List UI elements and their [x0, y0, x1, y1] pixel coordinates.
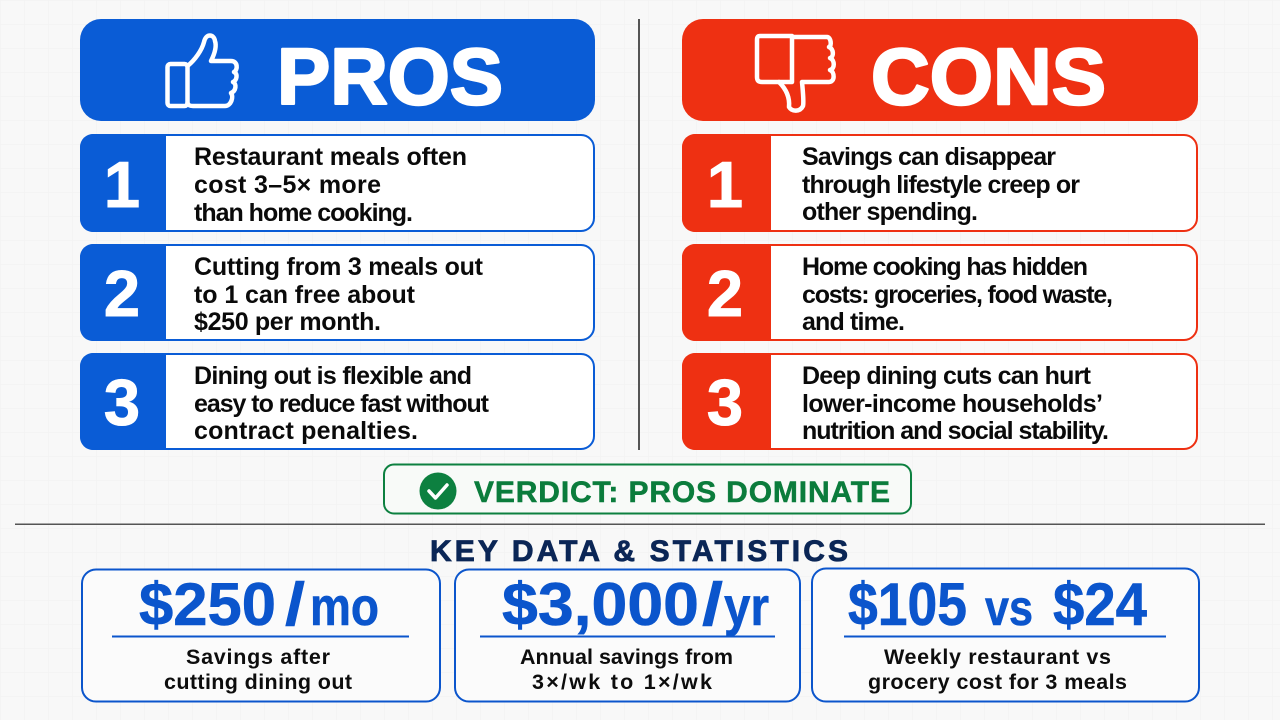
con item 2: Home cooking has hidden — [802, 253, 1088, 281]
con item 1: Savings can disappear — [802, 143, 1056, 171]
con item 2 — [682, 244, 1197, 341]
stat card 2: / — [702, 571, 723, 638]
cons header — [682, 19, 1198, 121]
con item 3: Deep dining cuts can hurt — [802, 362, 1092, 390]
pros title: PROS — [277, 32, 503, 121]
con item 2: costs: groceries, food waste, — [802, 281, 1113, 309]
pro item 2 — [80, 244, 594, 341]
verdict banner — [384, 464, 911, 514]
pro item 3: contract penalties. — [194, 417, 418, 445]
con item 3 — [682, 353, 1197, 450]
pro item 2: $250 per month. — [194, 308, 381, 336]
heading: key data and statistics: KEY DATA & STATISTICS — [430, 535, 848, 568]
con item 2: and time. — [802, 308, 905, 336]
stat card 3: grocery cost for 3 meals — [868, 670, 1127, 694]
pro item 1: Restaurant meals often — [194, 143, 467, 171]
pros header — [80, 19, 595, 121]
icon: check mark — [420, 472, 456, 510]
con item 3: nutrition and social stability. — [802, 417, 1109, 445]
stat card 2: 3×/wk to 1×/wk — [532, 670, 712, 694]
stat card 3: Weekly restaurant vs — [884, 645, 1111, 669]
con item 1: through lifestyle creep or — [802, 171, 1080, 199]
pro item 3: 3 — [104, 366, 140, 439]
stat card 1: cutting dining out — [164, 670, 352, 694]
icon: thumbs down — [757, 36, 834, 111]
stat card 3: $24 — [1053, 571, 1148, 638]
pro item 1: cost 3–5× more — [194, 171, 381, 199]
stat card 1: $250 — [139, 571, 276, 638]
panel: pros — [80, 19, 595, 450]
pro item 1: than home cooking. — [194, 199, 413, 227]
pro item 1 — [80, 134, 594, 232]
con item 3: 3 — [707, 366, 743, 439]
pro item 3: easy to reduce fast without — [194, 390, 490, 418]
con item 1: 1 — [707, 148, 743, 221]
pro item 3: Dining out is flexible and — [194, 362, 472, 390]
pro item 2: 2 — [104, 257, 140, 330]
verdict banner: VERDICT: PROS DOMINATE — [474, 476, 890, 509]
con item 2: 2 — [707, 257, 743, 330]
pro item 2: to 1 can free about — [194, 281, 416, 309]
cons title: CONS — [871, 32, 1106, 121]
stat card 3: vs — [985, 580, 1033, 636]
con item 1 — [682, 134, 1197, 232]
con item 1: other spending. — [802, 198, 978, 226]
stat card 1: mo — [310, 577, 379, 637]
stat card 1: Savings after — [186, 645, 331, 669]
panel: cons — [682, 19, 1198, 450]
stat card 2: yr — [724, 577, 769, 637]
stat card 3: $105 — [848, 571, 967, 638]
con item 3: lower-income households’ — [802, 390, 1103, 418]
stat card 3 — [812, 568, 1199, 702]
icon: thumbs up — [168, 36, 237, 106]
stat card 1: / — [285, 571, 305, 638]
stat card 1 — [82, 570, 440, 702]
pro item 1: 1 — [104, 148, 140, 221]
pro item 3 — [80, 353, 594, 450]
stat card 2 — [455, 570, 800, 702]
stat card 2: Annual savings from — [520, 645, 733, 669]
pro item 2: Cutting from 3 meals out — [194, 253, 484, 281]
stat card 2: $3,000 — [502, 571, 699, 638]
